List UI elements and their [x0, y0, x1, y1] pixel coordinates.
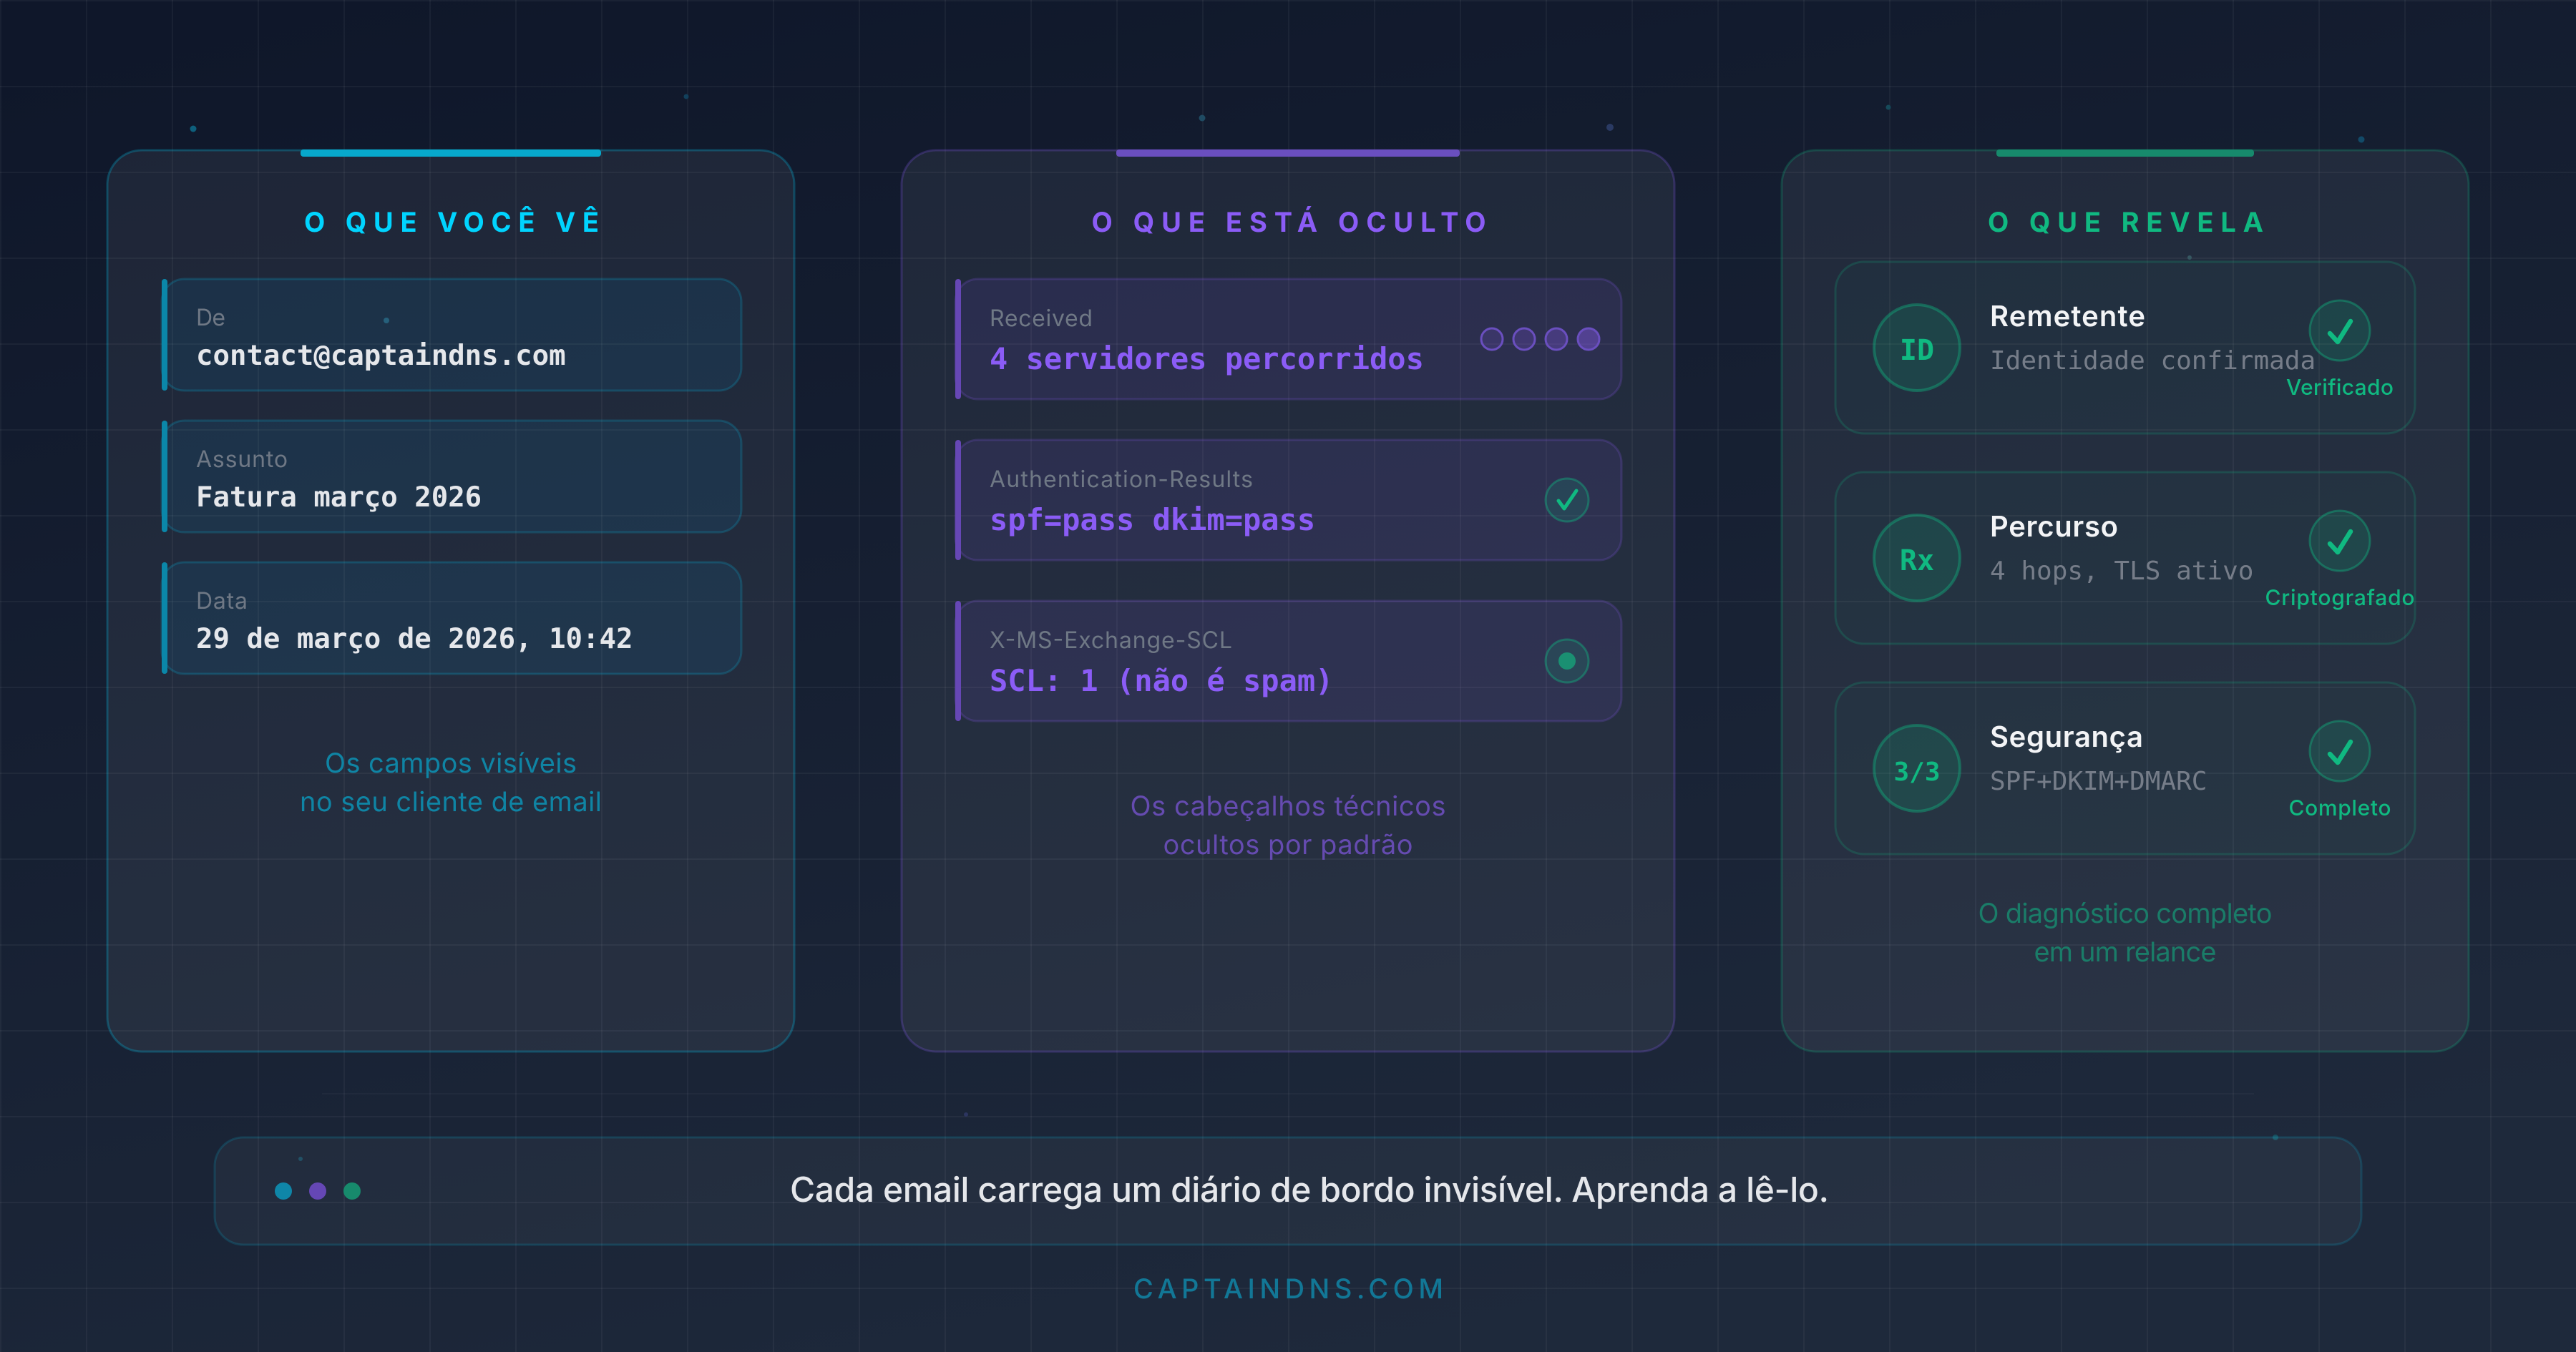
- caption: cabeçalhos técnicos: ocultos por padrão: [1163, 828, 1413, 861]
- caption: campos visíveis: no seu cliente de email: [300, 785, 602, 818]
- field: x-ms-exchange-scl: SCL: 1 (não é spam): [990, 663, 1333, 698]
- card: segurança: Segurança: [1990, 719, 2143, 754]
- field: received: Received: [990, 304, 1093, 332]
- field: authentication-results: [955, 440, 1621, 560]
- caption: diagnóstico completo: em um relance: [2034, 936, 2217, 969]
- field: data: 29 de março de 2026, 10:42: [196, 623, 633, 655]
- card: remetente: [1835, 262, 2415, 433]
- field: assunto: Fatura março 2026: [196, 481, 482, 514]
- caption: campos visíveis: Os campos visíveis: [325, 747, 577, 780]
- icon: check: [2310, 721, 2370, 781]
- card: remetente: ID: [1900, 334, 1934, 367]
- icon: check: [1546, 479, 1589, 521]
- caption: diagnóstico completo: [1978, 897, 2273, 969]
- icon: three dots: [275, 1182, 361, 1200]
- panel: o que revela: [1782, 150, 2469, 1052]
- field: de: De: [196, 303, 225, 331]
- field: de: [162, 279, 741, 391]
- caption: diagnóstico completo: O diagnóstico completo: [1978, 897, 2273, 930]
- icon: check: [2310, 511, 2370, 571]
- card: segurança: 3/3: [1893, 758, 1941, 787]
- panel: o que você vê: [107, 150, 794, 1052]
- card: remetente: Identidade confirmada: [1990, 346, 2316, 376]
- field: data: [162, 562, 741, 674]
- caption: cabeçalhos técnicos: [1131, 790, 1445, 861]
- card: segurança: [1835, 682, 2415, 854]
- caption: campos visíveis: [300, 747, 602, 818]
- card: percurso: Percurso: [1990, 509, 2118, 544]
- field: received: [955, 279, 1621, 399]
- panel: o que está oculto: [902, 150, 1674, 1052]
- card: percurso: Criptografado: [2265, 585, 2414, 611]
- field: de: contact@captaindns.com: [196, 340, 566, 372]
- card: percurso: [1835, 472, 2415, 644]
- card: remetente: Verificado: [2286, 375, 2394, 401]
- field: received: 4 servidores percorridos: [990, 341, 1424, 376]
- card: segurança: SPF+DKIM+DMARC: [1990, 767, 2207, 796]
- field: assunto: Assunto: [196, 445, 288, 473]
- field: assunto: [162, 421, 741, 532]
- caption: cabeçalhos técnicos: Os cabeçalhos técnicos: [1131, 790, 1445, 823]
- card: percurso: 4 hops, TLS ativo: [1990, 557, 2253, 586]
- heading: o que revela: O QUE REVELA: [1988, 206, 2263, 239]
- field: authentication-results: Authentication-Results: [990, 465, 1253, 493]
- field: x-ms-exchange-scl: [955, 601, 1621, 721]
- banner: diário de bordo: [215, 1137, 2361, 1245]
- icon: check: [2310, 300, 2370, 361]
- footer brand: CAPTAINDNS.COM: [1133, 1273, 1443, 1306]
- banner text: Cada email carrega um diário de bordo invisível. Aprenda a lê-lo.: [790, 1168, 1829, 1210]
- card: remetente: Remetente: [1990, 298, 2145, 333]
- field: authentication-results: spf=pass dkim=pass: [990, 502, 1315, 537]
- card: percurso: Rx: [1900, 544, 1934, 577]
- icon: hop dots: [1481, 328, 1599, 350]
- heading: o que está oculto: O QUE ESTÁ OCULTO: [1092, 205, 1485, 239]
- field: x-ms-exchange-scl: X-MS-Exchange-SCL: [990, 626, 1232, 654]
- field: data: Data: [196, 587, 248, 614]
- heading: o que você vê: O QUE VOCÊ VÊ: [304, 205, 599, 239]
- card: segurança: Completo: [2288, 795, 2391, 821]
- icon: status dot: [1546, 640, 1589, 682]
